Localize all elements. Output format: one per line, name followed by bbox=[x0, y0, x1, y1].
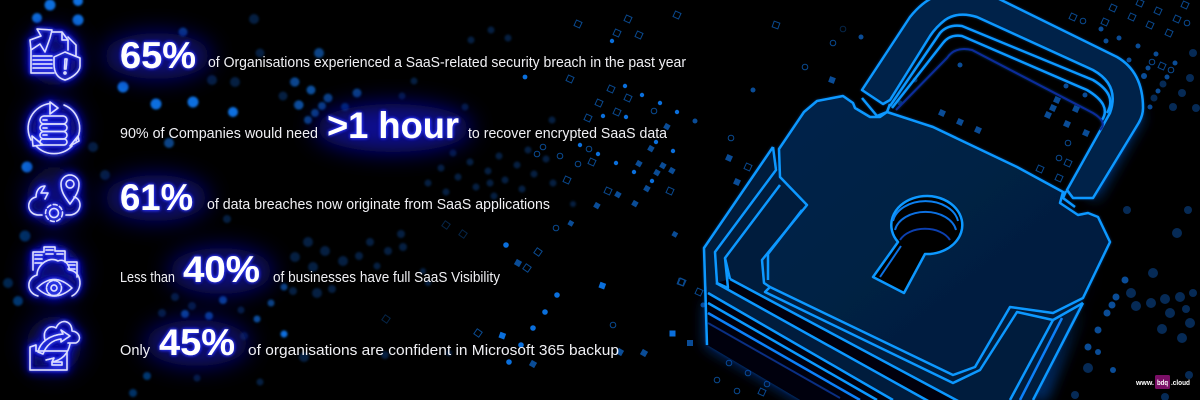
padlock: front face bbox=[762, 96, 1110, 383]
logo: www.bdq.cloud: bdq bbox=[1157, 380, 1168, 387]
logo: www.bdq.cloud bbox=[1135, 375, 1190, 389]
background bokeh dots bbox=[3, 0, 576, 397]
background small particles bbox=[382, 0, 1200, 400]
text: row 3: of data breaches now originate from SaaS applications bbox=[207, 197, 550, 213]
padlock: keyhole bbox=[873, 196, 962, 293]
stat row 3 bbox=[29, 175, 550, 222]
padlock illustration bbox=[704, 0, 1143, 400]
stat row 1 bbox=[30, 29, 686, 80]
statistic >1 hour: >1 hour bbox=[327, 105, 459, 146]
logo: www.bdq.cloud: .cloud bbox=[1171, 380, 1190, 387]
icon: database with circular arrows bbox=[28, 102, 80, 154]
text: row 1: of Organisations experienced a SaaS-related security breach in the past year bbox=[208, 55, 686, 71]
text: row 5 tail: of organisations are confident in Microsoft 365 backup bbox=[248, 343, 619, 359]
text: row 2 lead: 90% of Companies would need bbox=[120, 126, 318, 142]
icon: buildings, cloud and eye bbox=[29, 247, 80, 296]
padlock: left broken piece and layered base bbox=[704, 147, 1083, 400]
icon: cloud with location pin and gear bbox=[29, 175, 80, 222]
stat row 2 bbox=[28, 102, 668, 154]
icon: box and cloud backup arrows bbox=[30, 322, 79, 370]
statistic 65%: 65% bbox=[120, 35, 196, 76]
statistic 45%: 45% bbox=[159, 322, 235, 363]
padlock: lower glow bbox=[706, 110, 1143, 400]
logo: www.bdq.cloud: www. bbox=[1135, 380, 1154, 387]
statistic 61%: 61% bbox=[120, 177, 193, 218]
icon: breached document with warning shield bbox=[30, 29, 80, 80]
text: row 5 lead: Only bbox=[120, 343, 151, 359]
glow halos behind statistics and icons bbox=[26, 28, 471, 373]
text: row 4 lead: Less than bbox=[120, 270, 175, 286]
stat row 5 bbox=[30, 322, 619, 370]
statistic 40%: 40% bbox=[183, 249, 260, 290]
text: row 2 tail: to recover encrypted SaaS data bbox=[468, 126, 668, 142]
text: row 4 tail: of businesses have full SaaS Visibility bbox=[273, 270, 501, 286]
padlock: shackle bbox=[862, 0, 1143, 207]
stat row 4 bbox=[29, 247, 501, 296]
